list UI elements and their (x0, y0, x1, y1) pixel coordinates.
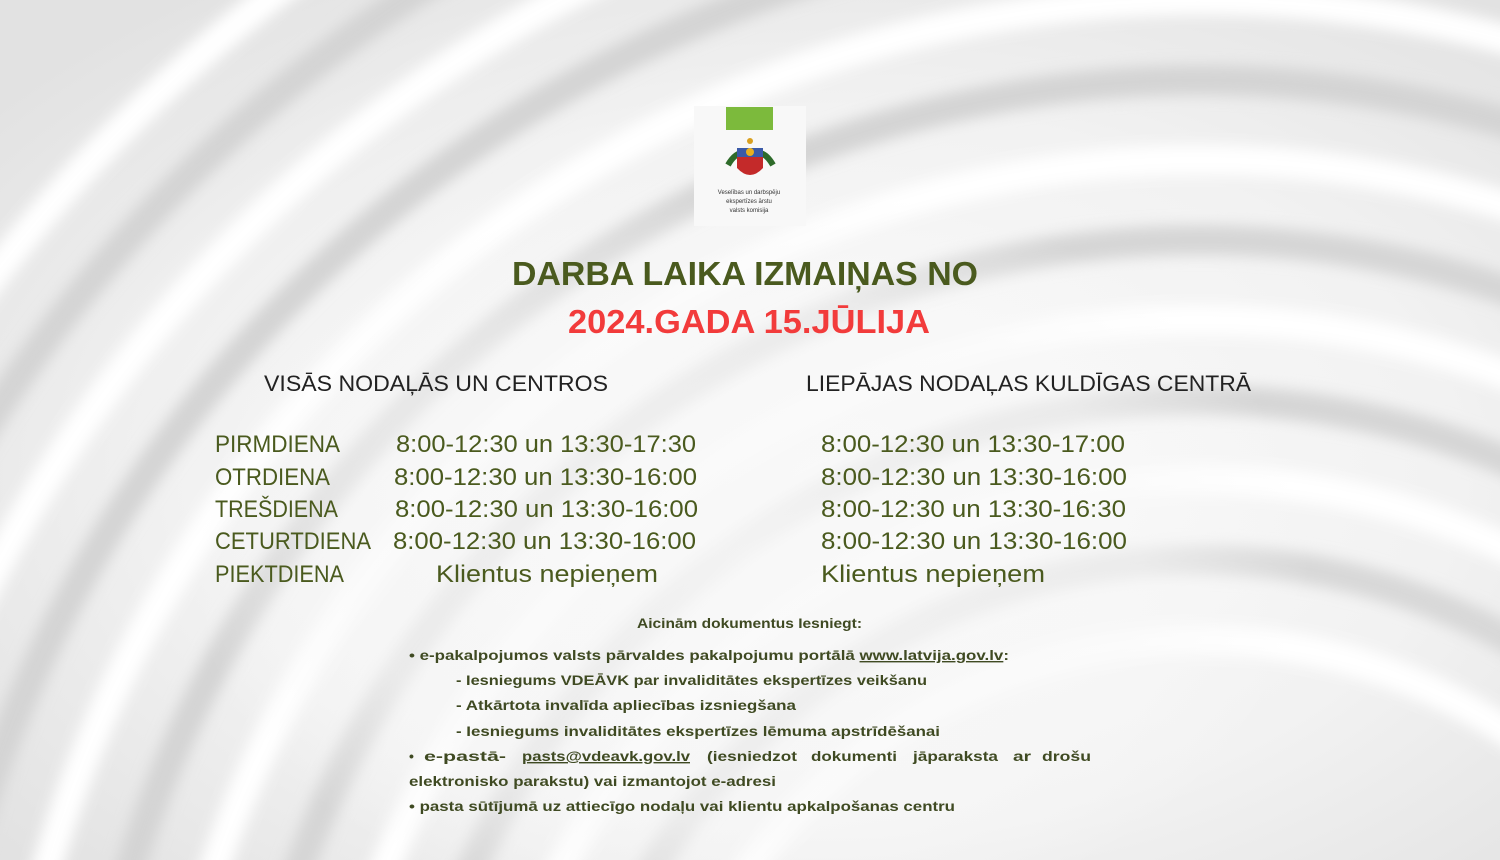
schedule table: 8:00-12:30 un 13:30-17:30 (396, 431, 696, 458)
submission info: - Iesniegums VDEĀVK par invaliditātes ekspertīzes veikšanu (456, 672, 927, 688)
column headings: VISĀS NODAĻĀS UN CENTROS (264, 371, 608, 396)
submission info: • e-pakalpojumos valsts pārvaldes pakalpojumu portālā www.latvija.gov.lv : (409, 647, 1009, 663)
submission info: • pasta sūtījumā uz attiecīgo nodaļu vai klientu apkalpošanas centru (409, 798, 955, 814)
schedule table: 8:00-12:30 un 13:30-16:00 (394, 464, 697, 491)
schedule table: 8:00-12:30 un 13:30-16:00 (821, 464, 1127, 491)
schedule table: 8:00-12:30 un 13:30-17:00 (821, 431, 1125, 458)
logo (694, 106, 806, 226)
title: 2024.GADA 15.JŪLIJA (568, 303, 930, 340)
submission info: jāparaksta (912, 748, 998, 764)
schedule table: 8:00-12:30 un 13:30-16:30 (821, 496, 1126, 523)
submission info: elektronisko parakstu) vai izmantojot e-adresi (409, 773, 776, 789)
column headings: LIEPĀJAS NODAĻAS KULDĪGAS CENTRĀ (806, 371, 1251, 396)
logo: valsts komisija (730, 208, 769, 214)
schedule table: PIEKTDIENA (215, 561, 344, 588)
submission info: drošu (1042, 748, 1091, 764)
submission info: e-pastā- (424, 748, 507, 764)
submission info: ar (1013, 748, 1032, 764)
submission info: • (409, 748, 414, 764)
schedule table: 8:00-12:30 un 13:30-16:00 (393, 528, 696, 555)
title: DARBA LAIKA IZMAIŅAS NO (512, 255, 978, 292)
schedule table: 8:00-12:30 un 13:30-16:00 (821, 528, 1127, 555)
schedule table: Klientus nepieņem (436, 561, 658, 588)
schedule table: OTRDIENA (215, 464, 330, 491)
schedule table: CETURTDIENA (215, 528, 371, 555)
submission info: - Atkārtota invalīda apliecības izsniegšana (456, 697, 796, 713)
schedule table (215, 431, 1127, 588)
schedule table: 8:00-12:30 un 13:30-16:00 (395, 496, 698, 523)
submission info: - Iesniegums invaliditātes ekspertīzes lēmuma apstrīdēšanai (456, 723, 940, 739)
schedule table: Klientus nepieņem (821, 561, 1045, 588)
logo: Veselības un darbspēju (718, 190, 780, 196)
submission info: Aicinām dokumentus Iesniegt: (637, 615, 862, 631)
title (512, 255, 978, 340)
submission info (409, 615, 1091, 814)
submission info: pasts@vdeavk.gov.lv (522, 748, 690, 764)
logo: ekspertīzes ārstu (726, 199, 772, 205)
submission info: (iesniedzot (707, 748, 797, 764)
submission info: dokumenti (811, 748, 897, 764)
schedule table: TREŠDIENA (215, 495, 338, 523)
column headings (264, 371, 1251, 396)
schedule table: PIRMDIENA (215, 431, 340, 458)
